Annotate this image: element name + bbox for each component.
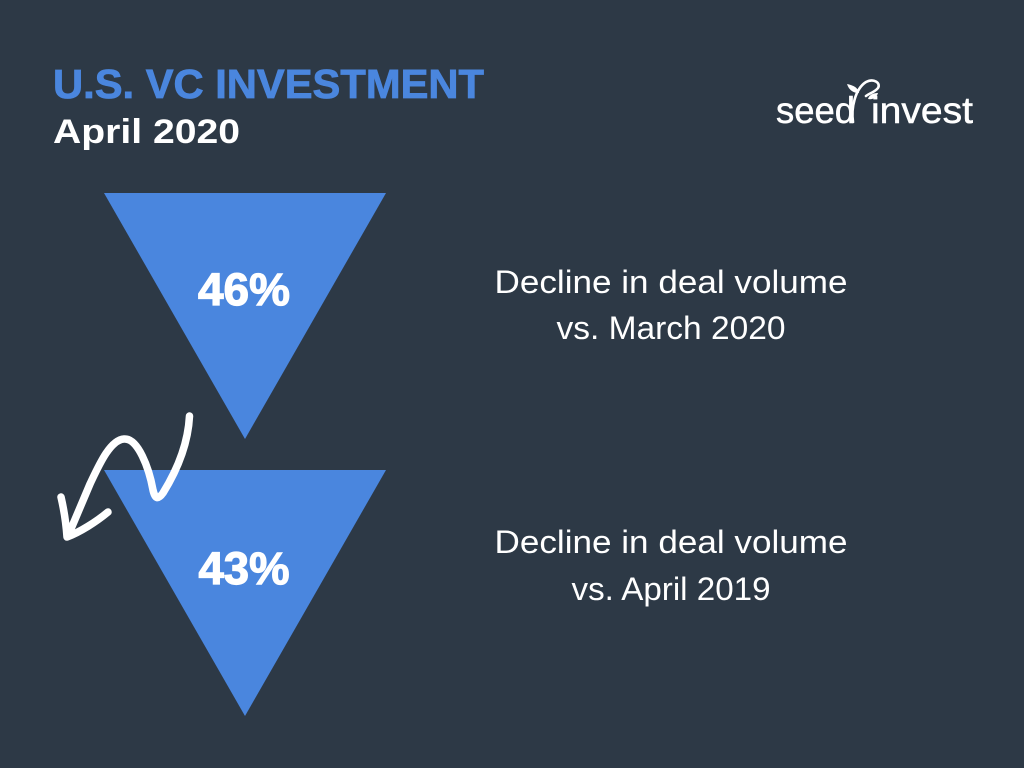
logo: seedinvest: seed (776, 90, 855, 131)
triangle: 43% (104, 470, 386, 716)
text block: decline vs March 2020: Decline in deal volume (494, 264, 848, 300)
value: 43%: 43% (198, 543, 290, 594)
text block: decline vs March 2020: vs. March 2020 (556, 310, 786, 346)
panel: 43% decline (104, 470, 386, 716)
triangle: 46% (104, 193, 386, 439)
logo: seedinvest: invest (871, 90, 974, 131)
value: 46%: 46% (198, 264, 290, 315)
logo: seedinvest (776, 81, 974, 131)
text block: decline vs March 2020 (494, 264, 848, 346)
text block: decline vs April 2019: Decline in deal volume (494, 524, 848, 560)
text block: decline vs April 2019: vs. April 2019 (572, 571, 770, 607)
title: U.S. VC INVESTMENT (53, 61, 484, 107)
panel: 46% decline (104, 193, 386, 439)
subtitle: April 2020 (53, 113, 240, 151)
arrow: squiggle (61, 416, 190, 537)
text block: decline vs April 2019 (494, 524, 848, 607)
